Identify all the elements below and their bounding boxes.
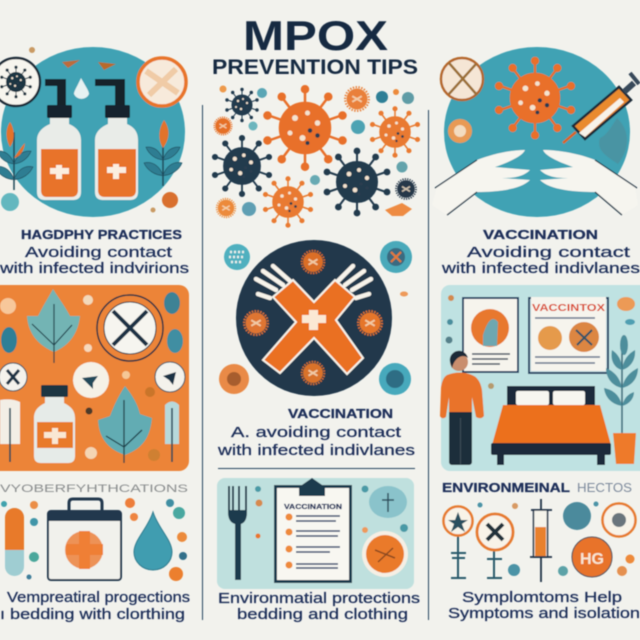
pale teal background xyxy=(441,285,640,471)
confetti specks xyxy=(1,498,187,581)
panel: virus cluster xyxy=(213,86,419,273)
badge: right spots xyxy=(380,241,412,273)
text: symptoms help: Symplomtoms Help xyxy=(462,589,622,606)
orange badge xyxy=(572,537,612,577)
text: protections: Vempreatiral progections xyxy=(7,590,190,606)
orange viruses xyxy=(214,87,419,227)
left spore badge xyxy=(219,364,249,394)
icon: syringe xyxy=(563,73,639,143)
teal blob icon xyxy=(369,486,407,518)
icon: crossed badge xyxy=(138,58,186,106)
small specks xyxy=(255,486,408,538)
teal circle xyxy=(1,47,185,217)
orange spore icons xyxy=(244,251,382,384)
text: symptoms and isolation: Symptoms and isolation xyxy=(448,605,640,622)
icon: sign two xyxy=(477,514,513,578)
icon: capsule xyxy=(5,508,24,576)
title xyxy=(212,12,418,79)
panel: symptoms xyxy=(442,481,640,622)
icon: lower leaf xyxy=(98,386,152,463)
text: infected individuals: with infected indivlanes xyxy=(441,260,640,277)
teal circle xyxy=(444,47,630,217)
panel: hand hygiene xyxy=(0,47,189,277)
person xyxy=(440,351,484,465)
small flecks xyxy=(1,47,178,212)
checklist xyxy=(286,514,340,568)
right teal badge xyxy=(379,363,411,395)
small specks xyxy=(478,502,634,576)
icon: virus ring xyxy=(602,504,636,536)
orange background xyxy=(0,285,189,471)
heading: practices: HAGDPHY PRACTICES xyxy=(21,227,182,242)
left poster xyxy=(463,298,518,372)
icon: right hand xyxy=(540,150,638,215)
pale teal background xyxy=(217,478,414,589)
icon: fork xyxy=(228,486,247,580)
panel: orange supplies xyxy=(0,285,189,471)
wall specks xyxy=(446,295,635,389)
virus xyxy=(496,58,574,138)
heading: vaccination: VACCINATION xyxy=(288,406,393,421)
badge text: HG xyxy=(580,551,604,568)
dark circle xyxy=(236,240,392,396)
text: environmental protections: Environmatial protections xyxy=(218,591,420,607)
large orange virus xyxy=(264,86,346,170)
badge: left spots xyxy=(224,244,250,270)
teal blobs xyxy=(220,86,414,216)
title: MPOX xyxy=(243,12,388,59)
text: infected individuals: with infected indivlanes xyxy=(217,442,415,459)
text: bedding and clothing: bedding and clothing xyxy=(237,606,408,623)
panel: first aid kit xyxy=(0,483,190,623)
potted plant xyxy=(604,335,638,464)
leaf xyxy=(599,118,627,164)
icon: crossed badge xyxy=(441,58,483,100)
right poster xyxy=(529,297,608,373)
icon: medicine bottle xyxy=(34,385,75,463)
small fleck xyxy=(400,292,408,296)
icon: virus badge xyxy=(0,58,40,106)
icon: left plant xyxy=(0,122,33,190)
text: bedding and clothing: ı bedding with clorthing xyxy=(0,606,185,623)
icon: water drop xyxy=(134,512,172,570)
heading: environmental: ENVIRONMEINAL xyxy=(442,481,570,495)
icon: right sanitizer bottle xyxy=(95,79,138,200)
panel: no contact xyxy=(217,240,415,459)
title: PREVENTION TIPS xyxy=(212,56,418,79)
icon: large leaf xyxy=(27,289,80,363)
clipboard xyxy=(276,478,350,582)
icon: left hand xyxy=(432,150,530,215)
dark viruses xyxy=(213,88,416,215)
panel: vaccination record xyxy=(217,478,420,623)
bed xyxy=(491,386,611,465)
specks xyxy=(0,295,160,461)
text: avoiding contact: Avoiding contact xyxy=(25,244,173,261)
text: avoiding contact: A. avoiding contact xyxy=(231,424,402,441)
thermometers xyxy=(0,399,179,462)
heading: faded help: HECTOS xyxy=(577,481,632,495)
text: avoiding contact: Avoiding contact xyxy=(467,244,631,261)
icon: syringe xyxy=(530,499,552,582)
text: infected individuals: with infected indvirions xyxy=(0,260,189,277)
icon: sign one xyxy=(444,506,472,578)
small leaves xyxy=(1,292,183,353)
gloves xyxy=(256,266,371,298)
panel: vaccination xyxy=(432,47,640,277)
label: vaccintox: VACCINTOX xyxy=(532,302,605,314)
heading: vaccination: VACCINATION xyxy=(483,227,598,242)
crossed arms xyxy=(256,266,371,374)
icon: first aid case xyxy=(48,499,121,580)
icon: right plant xyxy=(144,120,182,186)
small orange badge xyxy=(448,119,472,143)
round badges xyxy=(0,362,185,398)
faded heading: VYOBERFYHTHCATIONS xyxy=(0,483,188,495)
teal disc xyxy=(563,502,591,530)
label: vaccination: VACCINATION xyxy=(284,502,342,511)
icon: water drop xyxy=(74,78,89,99)
orange badge xyxy=(362,531,408,577)
icon: prohibited badge xyxy=(97,295,163,361)
icon: left sanitizer bottle xyxy=(37,79,81,200)
panel: bedroom xyxy=(440,285,640,471)
column dividers xyxy=(202,105,428,620)
